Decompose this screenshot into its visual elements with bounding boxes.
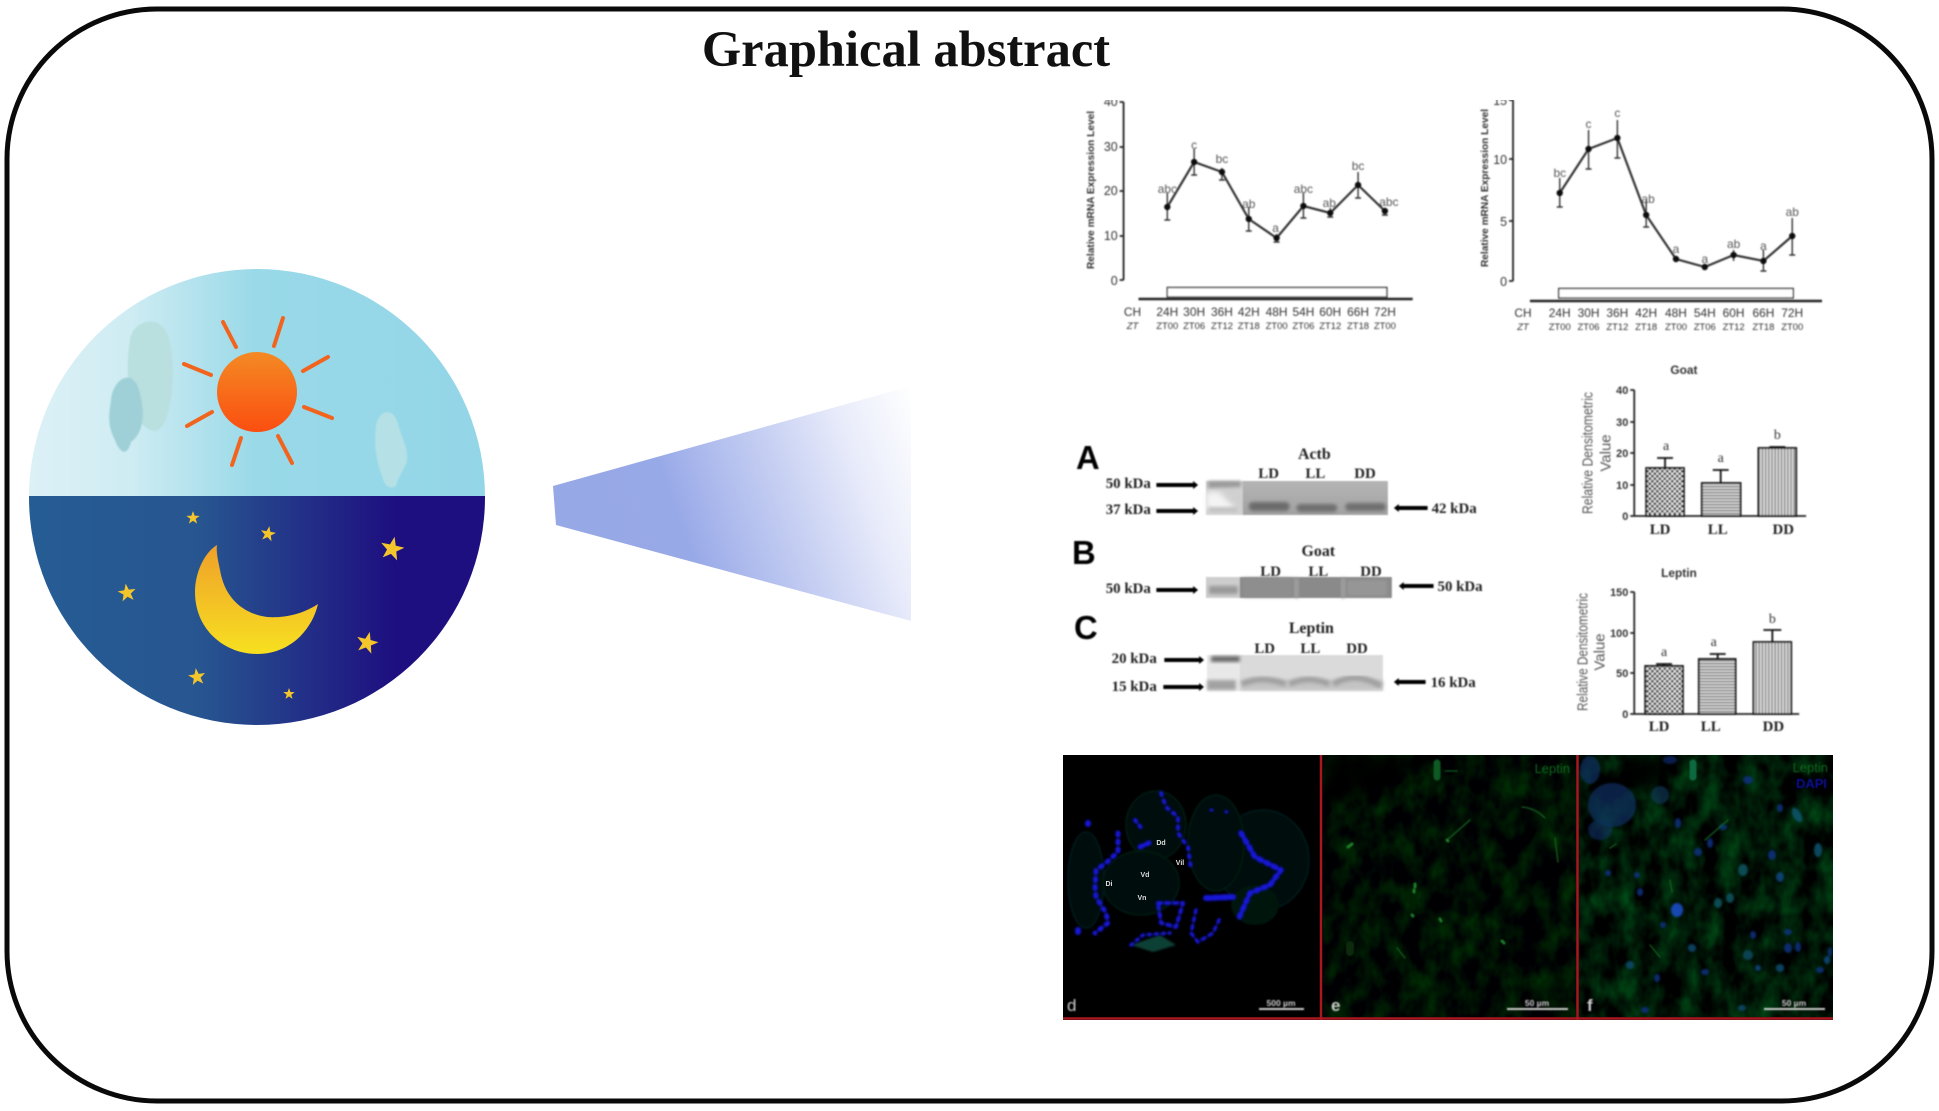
axes: 100 — [1610, 628, 1628, 640]
arrows — [1156, 582, 1434, 594]
blot title: Actb — [1298, 446, 1331, 463]
data line with error bars — [1164, 149, 1388, 242]
CH labels: 24H — [1549, 306, 1571, 320]
region labels: Vn — [1138, 895, 1146, 902]
CH labels: 60H — [1319, 305, 1341, 319]
panel f: merged channels: 50 µm — [1782, 998, 1807, 1008]
ZT labels: ZT06 — [1694, 322, 1716, 333]
region labels: Dd — [1156, 840, 1166, 847]
CH labels: 42H — [1238, 305, 1260, 319]
CH labels — [1124, 305, 1396, 319]
chart title: Goat — [1670, 363, 1698, 377]
line chart: right mRNA expression — [1480, 94, 1822, 333]
y axis — [1493, 94, 1513, 289]
blot image — [1207, 655, 1383, 691]
ZT labels: ZT12 — [1606, 322, 1628, 333]
blot image — [1206, 577, 1392, 598]
ZT labels: ZT12 — [1319, 321, 1341, 332]
CH labels: 48H — [1266, 305, 1288, 319]
time bar — [1138, 288, 1413, 299]
lane labels: LL — [1300, 641, 1320, 657]
channel label and scale bar: Leptin — [1535, 761, 1570, 776]
axes: 10 — [1616, 480, 1628, 492]
y axis title — [1575, 593, 1608, 711]
y axis: 30 — [1104, 140, 1118, 154]
ZT labels: ZT12 — [1723, 322, 1745, 333]
lane labels: LD — [1258, 466, 1279, 482]
significance letters: a — [1760, 239, 1767, 253]
panel e: leptin channel — [1323, 755, 1576, 1017]
y axis: 40 — [1104, 95, 1118, 109]
significance letters: bc — [1216, 152, 1228, 166]
icon: sun — [184, 318, 332, 465]
CH labels: 36H — [1211, 305, 1233, 319]
ZT labels: ZT00 — [1549, 322, 1571, 333]
ZT labels: ZT18 — [1347, 321, 1369, 332]
size markers: 16 kDa — [1431, 675, 1476, 691]
red panel borders — [1063, 755, 1833, 1020]
CH labels: 24H — [1156, 305, 1178, 319]
CH labels: 30H — [1183, 305, 1205, 319]
significance letters: c — [1586, 117, 1592, 131]
chart title: Leptin — [1661, 566, 1697, 580]
ZT labels: ZT00 — [1156, 321, 1178, 332]
size markers: 50 kDa — [1106, 581, 1151, 597]
western blot B: Goat — [1072, 534, 1483, 598]
CH labels: 60H — [1723, 306, 1745, 320]
axes — [1610, 587, 1799, 721]
ZT labels: ZT06 — [1292, 321, 1314, 332]
panel f: merged channels — [1579, 755, 1833, 1017]
size markers: 50 kDa — [1438, 579, 1483, 595]
significance letters: a — [1661, 645, 1667, 660]
immunofluorescence micrograph strip — [1063, 755, 1833, 1020]
right-hand data figures — [1072, 88, 1822, 735]
green fibres — [1610, 763, 1728, 957]
axes: 0 — [1622, 709, 1628, 721]
y axis title: Value — [1597, 434, 1614, 472]
y axis title — [1580, 392, 1614, 514]
y axis: 0 — [1111, 274, 1118, 288]
x labels: LD — [1649, 719, 1670, 735]
CH labels: CH — [1124, 305, 1141, 319]
data line with error bars — [1557, 120, 1795, 271]
significance letters: ab — [1642, 192, 1655, 206]
x labels — [1649, 719, 1784, 735]
lane labels: DD — [1346, 641, 1368, 657]
significance letters: abc — [1158, 182, 1177, 196]
axes: 40 — [1616, 385, 1628, 397]
axes: 0 — [1622, 511, 1628, 523]
y axis title: Relative mRNA Expression Level — [1480, 109, 1491, 267]
lane labels: LD — [1254, 641, 1275, 657]
panel f: merged channels: f — [1587, 996, 1593, 1015]
ZT labels: ZT00 — [1665, 322, 1687, 333]
lane labels — [1254, 641, 1368, 657]
y axis: 5 — [1500, 215, 1507, 229]
x labels: LL — [1708, 522, 1728, 538]
size markers: 20 kDa — [1112, 651, 1157, 667]
arrows — [1156, 481, 1428, 515]
significance letters: a — [1663, 439, 1669, 454]
CH labels: CH — [1514, 306, 1532, 320]
significance letters: ab — [1242, 197, 1256, 211]
ZT labels: ZT06 — [1578, 322, 1600, 333]
significance letters: ab — [1727, 237, 1741, 251]
CH labels: 72H — [1781, 306, 1803, 320]
size markers — [1106, 476, 1477, 518]
bars — [1645, 630, 1791, 714]
time bar — [1530, 288, 1822, 301]
significance letters — [1661, 612, 1776, 660]
significance letters — [1158, 138, 1398, 235]
day sky half — [29, 269, 485, 497]
night sky half — [29, 496, 485, 726]
blot image — [1206, 481, 1388, 515]
green fibres — [1348, 763, 1558, 958]
ZT labels: ZT — [1126, 321, 1140, 332]
ZT labels: ZT12 — [1211, 321, 1233, 332]
axes: 150 — [1610, 587, 1628, 599]
western blot A: Actb — [1076, 439, 1477, 518]
x labels: LD — [1650, 522, 1671, 538]
ZT labels — [1126, 321, 1396, 332]
y axis: 20 — [1104, 184, 1118, 198]
axes — [1616, 385, 1806, 523]
significance letters: a — [1701, 252, 1708, 266]
ZT labels: ZT00 — [1781, 322, 1803, 333]
panel d: whole section with blue nuclei — [1067, 791, 1309, 1015]
CH labels: 36H — [1606, 306, 1628, 320]
lane labels — [1258, 466, 1376, 482]
size markers — [1112, 651, 1476, 695]
panel letter and scale bar — [1066, 998, 1305, 1012]
ZT labels: ZT06 — [1183, 321, 1205, 332]
CH labels: 54H — [1292, 305, 1314, 319]
axes: 50 — [1616, 668, 1628, 680]
significance letters: b — [1774, 428, 1781, 443]
bar chart: Leptin — [1575, 566, 1799, 735]
ZT labels: ZT — [1516, 322, 1530, 333]
significance letters — [1663, 428, 1781, 466]
lane labels: LL — [1308, 564, 1328, 580]
significance letters: a — [1718, 451, 1724, 466]
panel e: leptin channel: 50 µm — [1525, 998, 1550, 1008]
significance letters: bc — [1553, 166, 1566, 180]
y axis: 10 — [1493, 153, 1507, 167]
y axis: 0 — [1500, 275, 1507, 289]
y axis — [1104, 95, 1124, 288]
significance letters: bc — [1352, 159, 1364, 173]
CH labels: 66H — [1752, 306, 1774, 320]
ZT labels: ZT18 — [1635, 322, 1657, 333]
size markers: 50 kDa — [1106, 476, 1151, 492]
significance letters: a — [1673, 242, 1680, 256]
arrows — [1163, 656, 1426, 691]
clouds — [109, 322, 407, 488]
y axis title: Relative mRNA Expression Level — [1086, 111, 1097, 269]
CH labels: 30H — [1578, 306, 1599, 320]
lane labels: DD — [1354, 466, 1376, 482]
y axis title: Relative Densitometric — [1580, 392, 1597, 514]
CH labels: 66H — [1347, 305, 1369, 319]
blue nuclei — [1580, 756, 1832, 1013]
ZT labels: ZT00 — [1374, 321, 1396, 332]
x labels: DD — [1773, 522, 1794, 538]
icon: day and night disc — [29, 269, 485, 726]
CH labels: 54H — [1694, 306, 1716, 320]
y axis title: Relative Densitometric — [1575, 593, 1592, 711]
CH labels — [1514, 306, 1803, 320]
region labels: Di — [1106, 881, 1113, 888]
significance letters: ab — [1323, 196, 1336, 210]
panel letter B: B — [1072, 534, 1096, 571]
region labels — [1106, 840, 1184, 902]
lane labels: LD — [1260, 564, 1281, 580]
x labels — [1650, 522, 1794, 538]
significance letters: a — [1272, 221, 1279, 235]
line chart: left mRNA expression — [1086, 95, 1413, 332]
y axis: 15 — [1493, 94, 1507, 108]
size markers: 15 kDa — [1112, 679, 1157, 695]
size markers: 37 kDa — [1106, 502, 1151, 518]
CH labels: 72H — [1374, 305, 1396, 319]
significance letters: ab — [1786, 205, 1799, 219]
significance letters: b — [1769, 612, 1776, 627]
panel letter and scale bar: d — [1067, 996, 1076, 1015]
panel e: leptin channel: e — [1331, 996, 1340, 1015]
y axis: 10 — [1104, 229, 1118, 243]
significance letters: a — [1711, 635, 1717, 650]
icon: crescent moon — [195, 545, 318, 654]
size markers — [1106, 579, 1483, 597]
axes: 20 — [1616, 448, 1628, 460]
icon: stars — [117, 511, 406, 699]
significance letters: c — [1614, 106, 1620, 120]
panel letter A: A — [1076, 439, 1100, 476]
CH labels: 42H — [1635, 306, 1657, 320]
bar chart: Goat — [1580, 363, 1806, 538]
strip background — [1063, 755, 1833, 1020]
western blot C: Leptin — [1074, 609, 1476, 695]
significance letters: c — [1191, 138, 1197, 152]
significance letters: abc — [1294, 182, 1313, 196]
x labels: LL — [1701, 719, 1721, 735]
ZT labels: ZT18 — [1752, 322, 1774, 333]
y axis title: Value — [1591, 633, 1608, 671]
bars — [1646, 447, 1796, 516]
panel letter C: C — [1074, 609, 1098, 646]
region labels: Vil — [1176, 860, 1184, 867]
region labels: Vd — [1141, 872, 1149, 879]
CH labels: 48H — [1665, 306, 1687, 320]
panel letter and scale bar: 500 µm — [1266, 998, 1296, 1008]
blot title: Leptin — [1289, 620, 1334, 637]
panel f: merged channels: DAPI — [1796, 776, 1827, 791]
title: Graphical abstract — [702, 21, 1110, 77]
axes: 30 — [1616, 417, 1628, 429]
channel labels and scale bar: Leptin — [1793, 760, 1828, 775]
significance letters — [1553, 106, 1799, 266]
blot title: Goat — [1302, 543, 1336, 560]
size markers: 42 kDa — [1432, 501, 1477, 517]
x labels: DD — [1763, 719, 1784, 735]
light beam wedge — [553, 386, 911, 621]
significance letters: abc — [1379, 195, 1398, 209]
ZT labels: ZT18 — [1238, 321, 1260, 332]
lane labels: DD — [1360, 564, 1382, 580]
ZT labels: ZT00 — [1266, 321, 1288, 332]
ZT labels — [1516, 322, 1803, 333]
lane labels — [1260, 564, 1382, 580]
lane labels: LL — [1305, 466, 1325, 482]
